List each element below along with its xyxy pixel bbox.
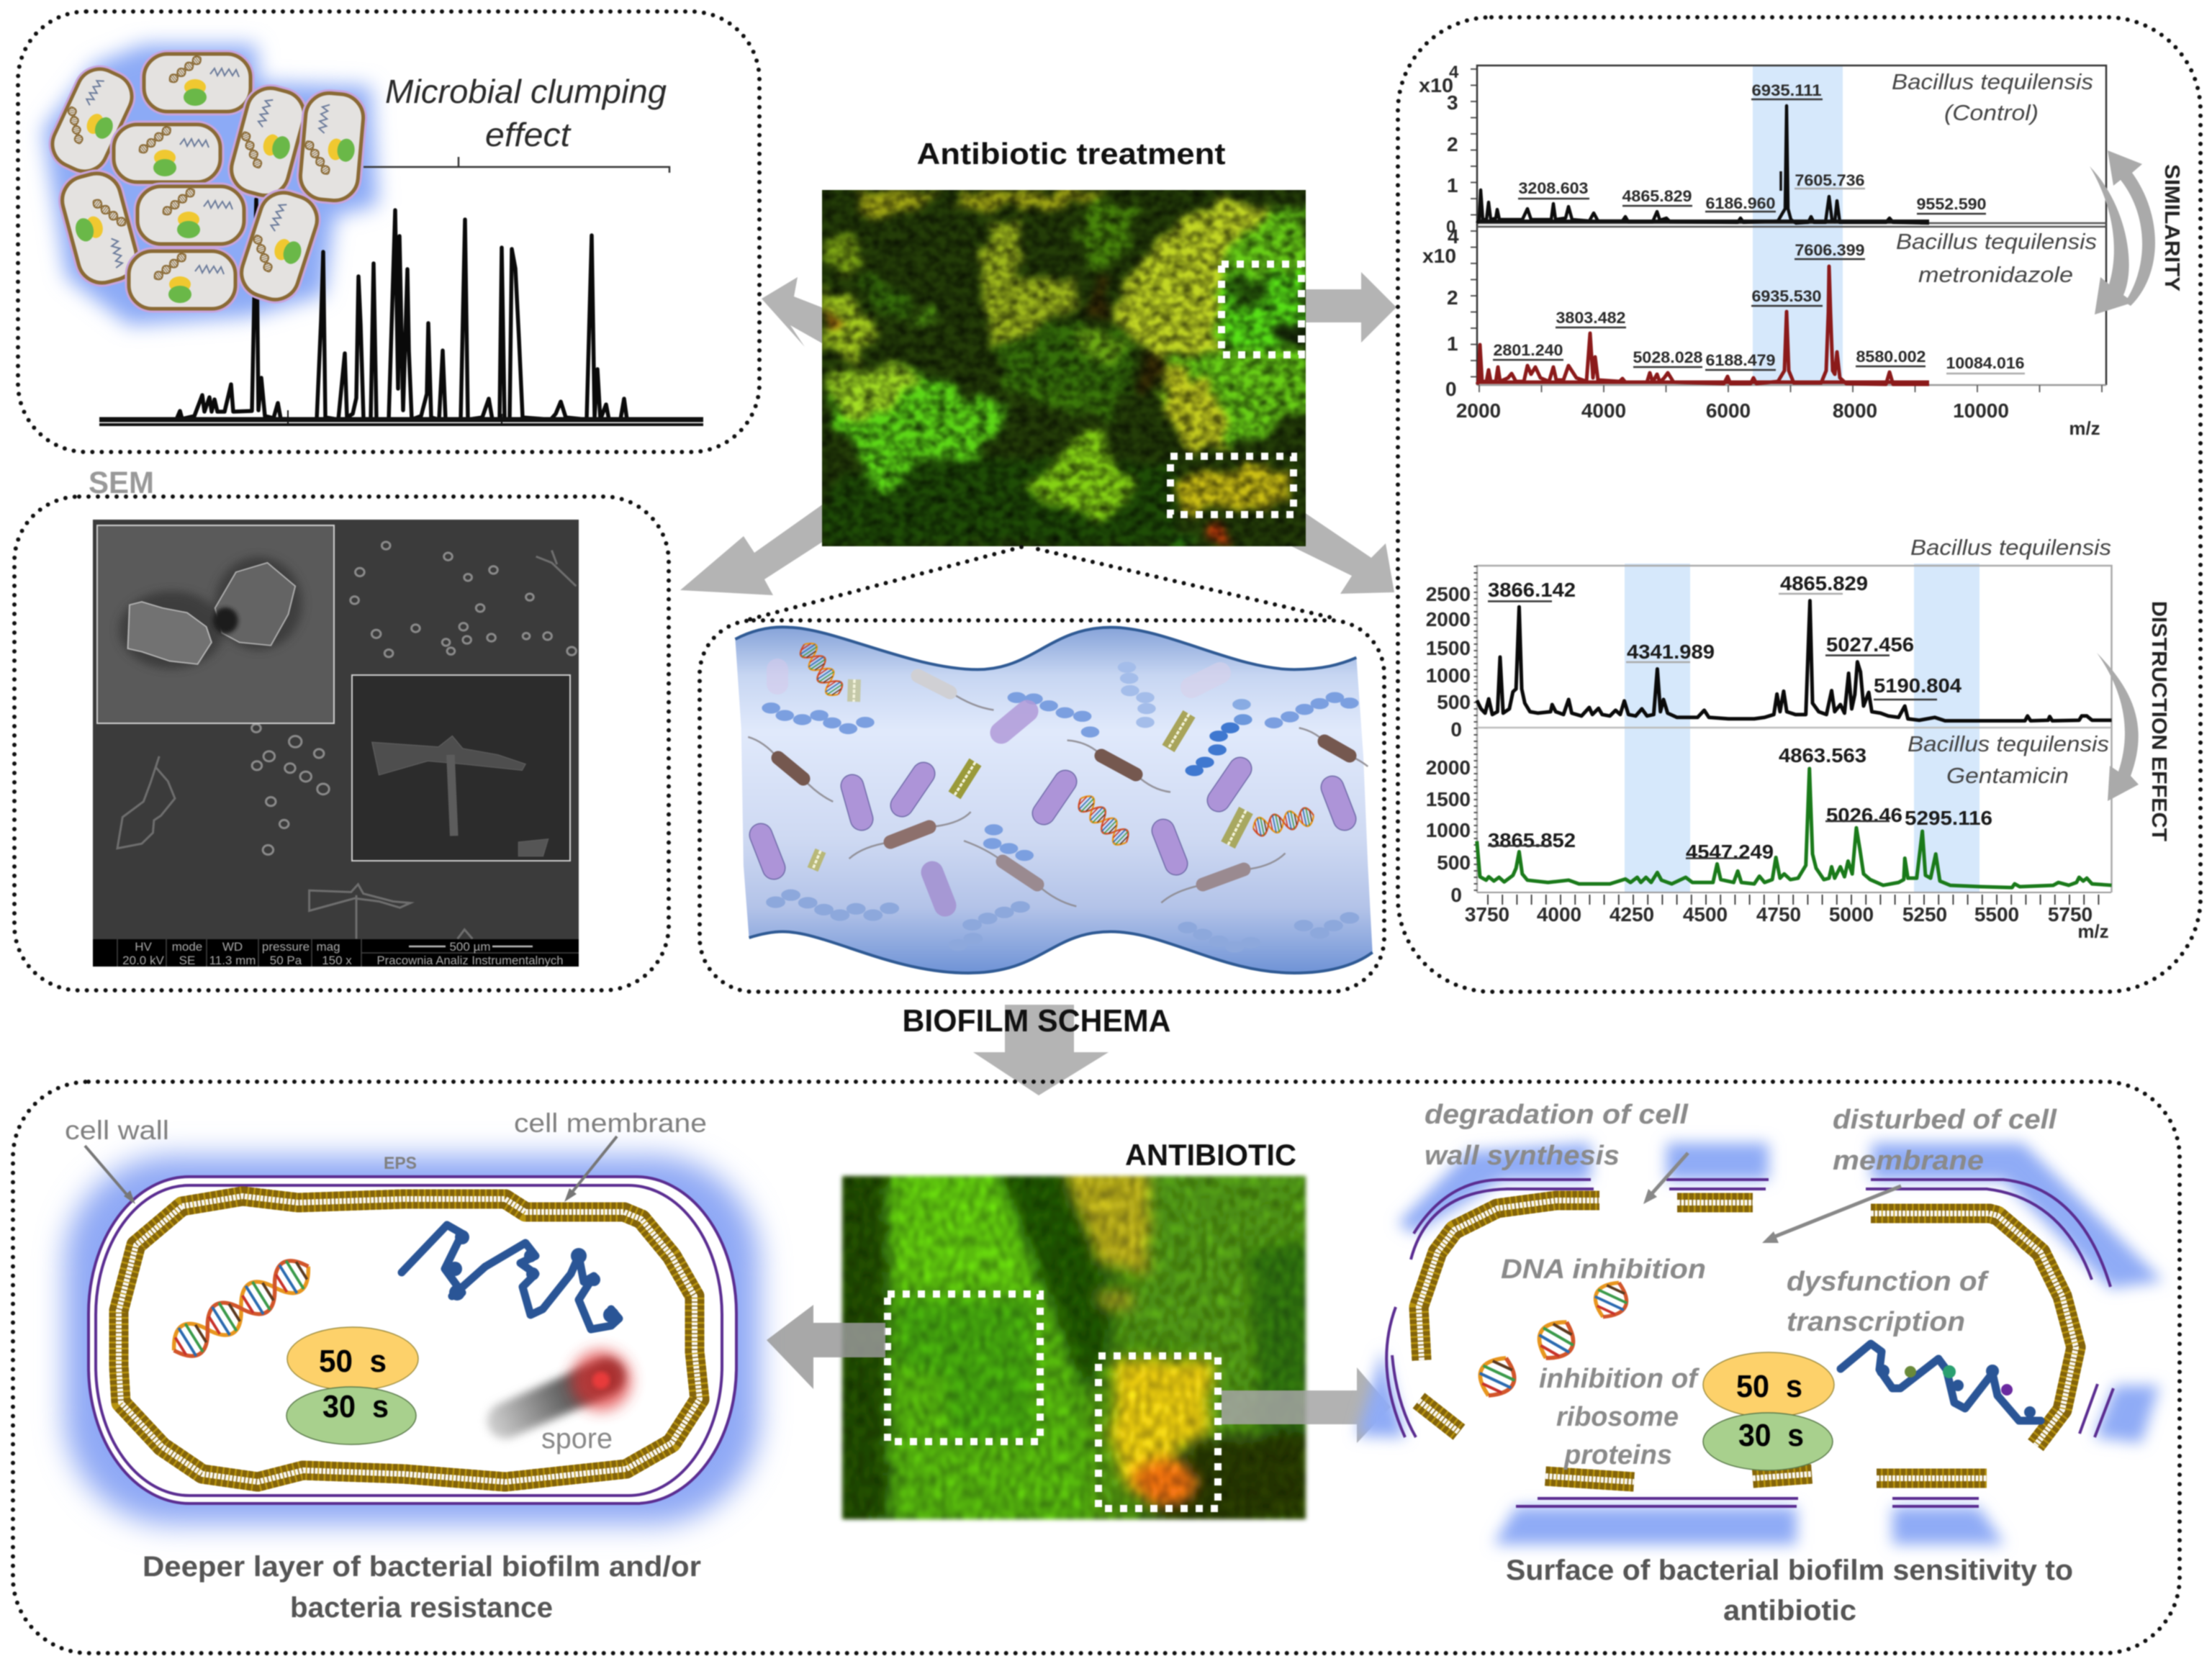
y and x axis labels: 0 [1450, 718, 1462, 741]
peak labels: 3803.482 [1556, 309, 1625, 327]
peak labels: 5026.46 [1826, 804, 1902, 826]
arrow: toward resistant cell [767, 1305, 885, 1389]
ribosome 50 s [287, 1327, 418, 1390]
SEM info bar: 20.0 kV [122, 954, 164, 967]
y and x axis labels: 3750 [1465, 903, 1509, 926]
control trace [1477, 106, 1929, 223]
heading: antibiotic: ANTIBIOTIC [1125, 1138, 1296, 1172]
y and x axis labels: 500 [1437, 851, 1471, 874]
species labels: Bacillus tequilensis [1892, 69, 2093, 94]
y and x axis labels: 2 [1447, 133, 1458, 155]
cell membrane [119, 1196, 700, 1482]
ribosome 50 s: 50 s [1736, 1369, 1802, 1404]
DNA fragments [1473, 1276, 1633, 1403]
species labels: Bacillus tequilensis [1908, 731, 2109, 756]
annotation labels: proteins [1563, 1440, 1672, 1470]
arrow: distruction curve [2097, 653, 2139, 801]
y and x axis labels: 2000 [1426, 608, 1471, 630]
y and x axis labels: 1000 [1426, 664, 1471, 687]
ribosome 30 s: 30 s [322, 1389, 389, 1424]
flagellated brown bacteria [778, 676, 1350, 885]
SEM info bar: pressure [262, 940, 310, 954]
heading: SEM: SEM [89, 466, 154, 500]
green trace [1477, 769, 2111, 887]
dotted selection squares [888, 1294, 1218, 1509]
y and x axis labels: 2500 [1426, 583, 1471, 605]
annotation labels: transcription [1787, 1307, 1965, 1337]
y and x axis labels: 0 [1445, 378, 1457, 400]
panel: biofilm schema [700, 620, 1384, 992]
y and x axis labels: 4000 [1537, 903, 1581, 926]
y and x axis labels: 1500 [1426, 788, 1471, 810]
caption: surface of biofilm: Surface of bacterial biofilm sensitivity to [1506, 1555, 2073, 1586]
cell wall outer [89, 1177, 736, 1503]
panel: bottom mechanism comparison [13, 1082, 2180, 1653]
peak labels: 5027.456 [1826, 633, 1914, 656]
SEM info bar: mode [172, 940, 202, 954]
SEM info bar: HV [135, 940, 152, 954]
arrow: similarity double curve [2090, 150, 2155, 315]
species labels: Bacillus tequilensis [1910, 535, 2111, 560]
bracket [364, 157, 669, 173]
peak label underlines [1493, 99, 1986, 370]
peak labels: 6186.960 [1706, 194, 1775, 212]
panel: mass spectra comparison [1398, 17, 2200, 992]
arrow: image to microbial clumping panel [762, 277, 823, 347]
dark chain [1186, 700, 1251, 775]
label: distruction effect: DISTRUCTION EFFECT [2147, 601, 2170, 841]
SEM info bar: SE [179, 954, 195, 967]
dotted selection squares on biofilm image [1170, 264, 1301, 515]
EPS glow [65, 1156, 759, 1524]
SEM info bar: WD [222, 940, 243, 954]
SEM info bar: mag [316, 940, 340, 954]
lower chains [767, 890, 1358, 951]
annotation labels: degradation of cell [1425, 1100, 1689, 1130]
faded chains [1119, 663, 1155, 727]
label: cell wall [65, 1116, 169, 1204]
annotation labels: dysfunction of [1787, 1267, 1990, 1297]
caption: surface of biofilm: antibiotic [1723, 1595, 1856, 1627]
y and x axis labels: 500 [1437, 691, 1471, 713]
peak labels: 5190.804 [1874, 674, 1962, 697]
annotation labels: ribosome [1556, 1402, 1679, 1432]
y and x axis labels: 4 [1448, 225, 1459, 248]
mass spectrum peaks [99, 199, 703, 426]
y and x axis labels: 5000 [1829, 903, 1874, 926]
biofilm wave borders [735, 627, 1373, 973]
SEM info bar: 500 µm [449, 940, 491, 954]
arrow: membrane disturbance [1762, 1186, 1901, 1243]
fluorescence image: antibiotic zoom [839, 1172, 1309, 1523]
spore [505, 1350, 631, 1455]
label: EPS: EPS [384, 1154, 417, 1173]
label: microbial clumping effect: effect [485, 116, 572, 153]
peak labels: 6935.111 [1752, 81, 1821, 99]
spore: spore [541, 1423, 613, 1455]
peak labels: 5028.028 [1633, 348, 1703, 366]
species labels [1908, 535, 2111, 788]
y and x axis labels: 4250 [1610, 903, 1654, 926]
peak labels: 6935.530 [1752, 287, 1821, 305]
species labels: metronidazole [1918, 262, 2073, 287]
caption: deeper layer: bacteria resistance [290, 1592, 553, 1624]
y and x axis labels: 4 [1449, 63, 1459, 82]
y and x axis labels: 4750 [1756, 903, 1801, 926]
y and x axis labels: 5250 [1902, 903, 1947, 926]
peak labels: 4865.829 [1780, 572, 1868, 594]
DNA fragments in matrix [797, 639, 1316, 849]
inset: collapsed biofilm fragment [352, 675, 570, 861]
peak labels: 6188.479 [1706, 351, 1775, 369]
y and x axis labels: 1500 [1426, 637, 1471, 659]
peak labels: 3208.603 [1519, 179, 1588, 197]
y and x axis labels: x10 [1422, 245, 1456, 267]
SEM info bar [93, 939, 579, 967]
annotation labels: inhibition of [1539, 1364, 1699, 1394]
y and x axis labels: 5750 [2048, 903, 2093, 926]
arrow: biofilm schema down to cells [973, 1005, 1109, 1095]
arrow: image to distruction spectra [1286, 512, 1394, 594]
title: antibiotic treatment: Antibiotic treatment [917, 137, 1226, 171]
connector: zoom lines to biofilm schema [746, 547, 1331, 620]
inset: cells close-up [97, 525, 334, 723]
DNA helix [165, 1252, 317, 1365]
SEM info bar: 50 Pa [270, 954, 302, 967]
label: microbial clumping effect [385, 73, 667, 153]
ribosome 50 s: 50 s [319, 1344, 387, 1379]
caption: deeper layer: Deeper layer of bacterial biofilm and/or [143, 1551, 701, 1583]
rod bacteria [761, 669, 1345, 905]
SEM info bar: 11.3 mm [209, 954, 256, 967]
peak labels: 5295.116 [1905, 807, 1992, 829]
peak label underlines [1488, 602, 1937, 858]
y and x axis labels [1419, 63, 2100, 439]
y and x axis labels [1426, 583, 2109, 942]
double-strand fibres [813, 679, 1246, 869]
resistant cell: deeper layer [65, 1108, 759, 1624]
chart: similarity spectra [1419, 63, 2106, 439]
y and x axis labels: 10000 [1953, 399, 2009, 422]
ribosome 30 s [286, 1387, 416, 1444]
y and x axis labels: 5500 [1974, 903, 2019, 926]
cell membrane fragments [1419, 1200, 2076, 1482]
caption: surface of biofilm [1506, 1555, 2073, 1627]
ribosome 50 s [1703, 1352, 1834, 1417]
peak labels: 4865.829 [1622, 187, 1692, 205]
y and x axis labels: 1 [1447, 333, 1458, 355]
bacterial cluster glow [43, 45, 378, 325]
species labels [1892, 69, 2097, 287]
y and x axis labels: 1000 [1426, 819, 1471, 841]
y and x axis labels: 4500 [1683, 903, 1728, 926]
cell wall fragments [1386, 1180, 2113, 1506]
sensitive cell: surface layer [1357, 1100, 2163, 1627]
polysaccharide chains [763, 693, 1358, 860]
arrow: toward sensitive cell [1222, 1367, 1391, 1443]
annotation labels: DNA inhibition [1501, 1254, 1706, 1285]
arrow: wall degradation [1643, 1153, 1688, 1204]
fragmented RNA [1841, 1344, 2041, 1421]
fluorescence microscopy image: biofilm [821, 189, 1307, 547]
RNA strand [402, 1225, 619, 1329]
cell wall inner [96, 1185, 722, 1496]
bacterial cells cluster [44, 53, 366, 309]
annotation labels: membrane [1833, 1146, 1984, 1176]
peak labels [1493, 81, 2024, 372]
annotation labels [1425, 1100, 2058, 1470]
SEM image [93, 520, 579, 967]
metronidazole trace [1477, 266, 1929, 384]
heading: biofilm schema: BIOFILM SCHEMA [903, 1003, 1170, 1039]
peak labels: 4547.249 [1686, 841, 1774, 863]
peak labels: 3865.852 [1488, 829, 1576, 851]
peak labels: 7606.399 [1795, 241, 1864, 259]
ribosome 30 s [1703, 1413, 1833, 1470]
y and x axis labels: 0 [1450, 884, 1462, 906]
SEM info bar: 150 x [322, 954, 352, 967]
peak labels: 4341.989 [1627, 641, 1715, 663]
annotation labels: wall synthesis [1425, 1141, 1620, 1171]
peak labels: 10084.016 [1946, 354, 2024, 372]
label: cell wall: cell wall [65, 1116, 169, 1145]
peak labels: 7605.736 [1795, 171, 1864, 189]
peak labels [1488, 572, 1992, 863]
y and x axis labels: 4000 [1581, 399, 1626, 422]
annotation labels: disturbed of cell [1833, 1105, 2058, 1135]
peak labels: 3866.142 [1488, 579, 1576, 601]
arrow: image to SEM panel [680, 504, 823, 595]
chart: distruction effect spectra [1426, 535, 2112, 942]
label: cell membrane: cell membrane [514, 1108, 707, 1138]
y and x axis labels: 2000 [1456, 399, 1501, 422]
label: similarity: SIMILARITY [2160, 164, 2183, 291]
y and x axis labels: 0 [1446, 217, 1455, 237]
species labels: Gentamicin [1946, 763, 2069, 788]
y and x axis labels: 1 [1447, 174, 1458, 196]
ribosome 30 s: 30 s [1738, 1418, 1804, 1453]
label: cell membrane [514, 1108, 707, 1202]
flagella [748, 692, 1368, 906]
y and x axis labels: 6000 [1706, 399, 1751, 422]
peak labels: 2801.240 [1493, 341, 1563, 359]
y and x axis labels: m/z [2069, 417, 2100, 439]
y and x axis labels: 3 [1447, 91, 1458, 114]
y and x axis labels: 8000 [1833, 399, 1877, 422]
species labels: Bacillus tequilensis [1896, 229, 2097, 254]
SEM info bar: Pracownia Analiz Instrumentalnych [377, 954, 563, 967]
EPS glow fragments [1357, 1143, 2163, 1544]
peak labels: 8580.002 [1856, 348, 1926, 366]
y and x axis labels: m/z [2077, 921, 2109, 942]
peak labels: 9552.590 [1916, 195, 1987, 213]
y and x axis labels: 2000 [1426, 756, 1471, 779]
biofilm matrix body [735, 627, 1373, 973]
black trace [1477, 601, 2111, 721]
species labels: (Control) [1944, 100, 2039, 125]
panel: SEM micrographs [14, 497, 669, 990]
y and x axis labels: x10 [1419, 74, 1453, 96]
panel: microbial clumping effect [18, 12, 759, 452]
arrow: image to similarity spectra [1304, 272, 1396, 343]
y and x axis labels: 2 [1447, 286, 1458, 309]
label: microbial clumping effect: Microbial clumping [385, 73, 667, 110]
peak labels: 4863.563 [1779, 744, 1866, 766]
caption: deeper layer [143, 1551, 701, 1624]
